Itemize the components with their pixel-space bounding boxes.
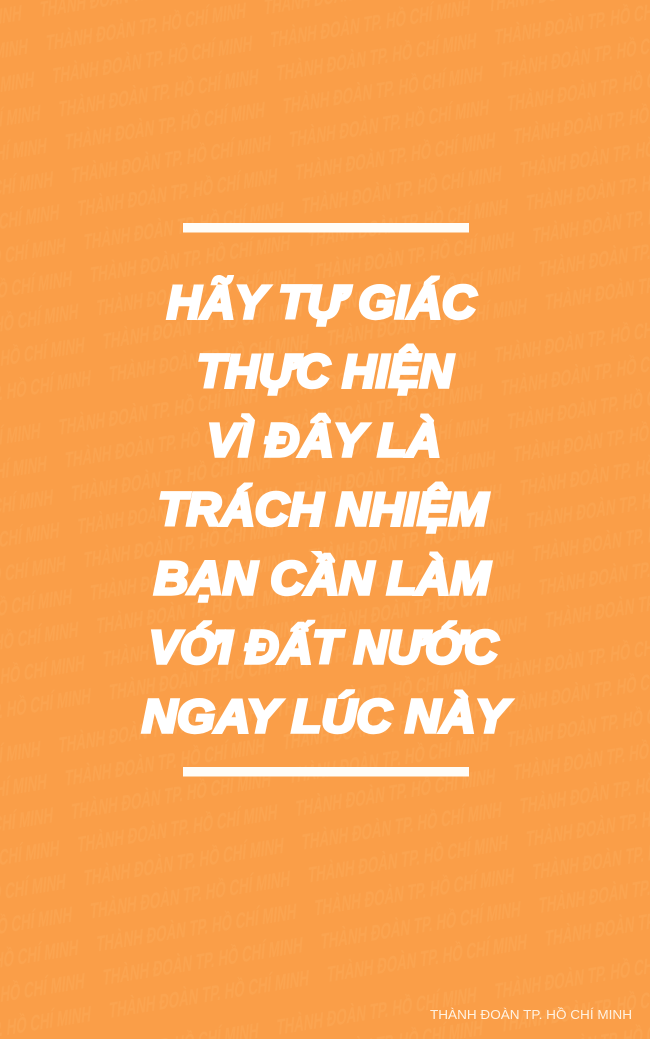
line 7: NGAY LÚC NÀY: [142, 690, 513, 742]
line 2: THỰC HIỆN: [197, 345, 454, 397]
bottom divider bar: [183, 767, 469, 776]
line 3: VÌ ĐÂY LÀ: [207, 414, 441, 466]
watermark pattern: [22, 94, 640, 943]
line 1: HÃY TỰ GIÁC: [167, 276, 477, 328]
line 6: VỚI ĐẤT NƯỚC: [149, 621, 499, 673]
footer credit: THÀNH ĐOÀN TP. HỒ CHÍ MINH: [430, 1007, 632, 1022]
top divider bar: [183, 223, 469, 232]
main message: [142, 276, 513, 742]
line 4: TRÁCH NHIỆM: [158, 483, 490, 535]
line 5: BẠN CẦN LÀM: [154, 552, 492, 604]
